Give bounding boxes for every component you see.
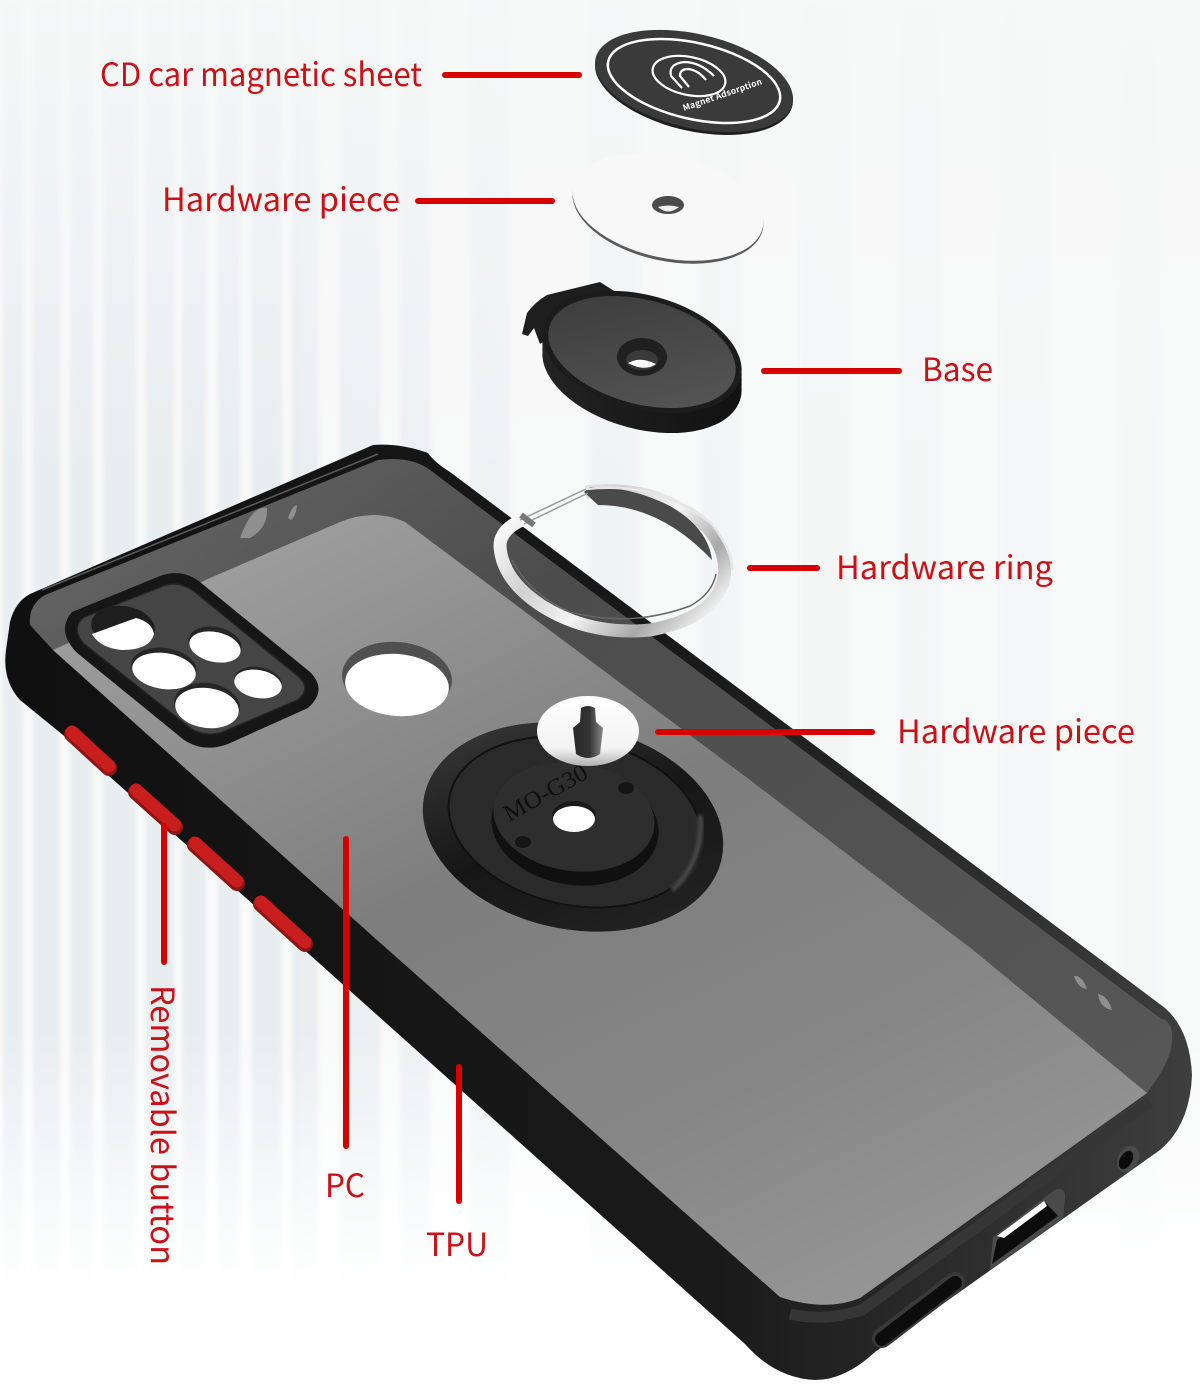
leader line: TPU (456, 1067, 462, 1201)
leader line: hardware ring (750, 565, 817, 571)
hardware piece disc (562, 137, 774, 280)
icon: magnet (649, 50, 729, 102)
label: Hardware piece upper: Hardware piece (162, 175, 400, 221)
camera lens holes (88, 602, 284, 732)
hardware ring (500, 487, 732, 631)
case outer TPU shell (5, 445, 1192, 1380)
charging port, speaker and mic openings (882, 1142, 1144, 1339)
magnetic ring mount (403, 696, 743, 958)
removable red buttons (72, 732, 305, 944)
engraved model text: MO-G30 (499, 760, 592, 827)
label: Hardware ring: Hardware ring (836, 543, 1053, 589)
label: Hardware piece lower: Hardware piece (897, 707, 1135, 753)
leader line: PC (343, 839, 349, 1146)
inner lip highlight (790, 1102, 1150, 1317)
label: Base: Base (922, 345, 993, 391)
phone case (5, 445, 1192, 1380)
CD car magnetic sheet (585, 12, 803, 152)
camera module (65, 573, 319, 748)
base (522, 271, 755, 453)
leader line: base (764, 368, 899, 374)
clear edge highlights (240, 505, 1112, 1010)
hardware piece with pin (537, 696, 639, 766)
logo cutout hole (339, 637, 455, 720)
sheet caption: Magnet Adsorption (681, 75, 763, 114)
leader line: CD car magnetic sheet (445, 72, 579, 78)
label: CD car magnetic sheet: CD car magnetic sheet (100, 50, 422, 96)
label: PC: PC (325, 1161, 365, 1207)
label: Removable button: Removable button (141, 985, 187, 1265)
leader line: hardware piece lower (658, 729, 872, 735)
rim reflection line (42, 454, 378, 590)
label: TPU: TPU (426, 1220, 488, 1266)
case inner clear back (30, 459, 1172, 1305)
leader line: removable button (161, 826, 167, 962)
leader line: hardware piece upper (418, 198, 552, 204)
frosted PC panel (53, 515, 1147, 1305)
